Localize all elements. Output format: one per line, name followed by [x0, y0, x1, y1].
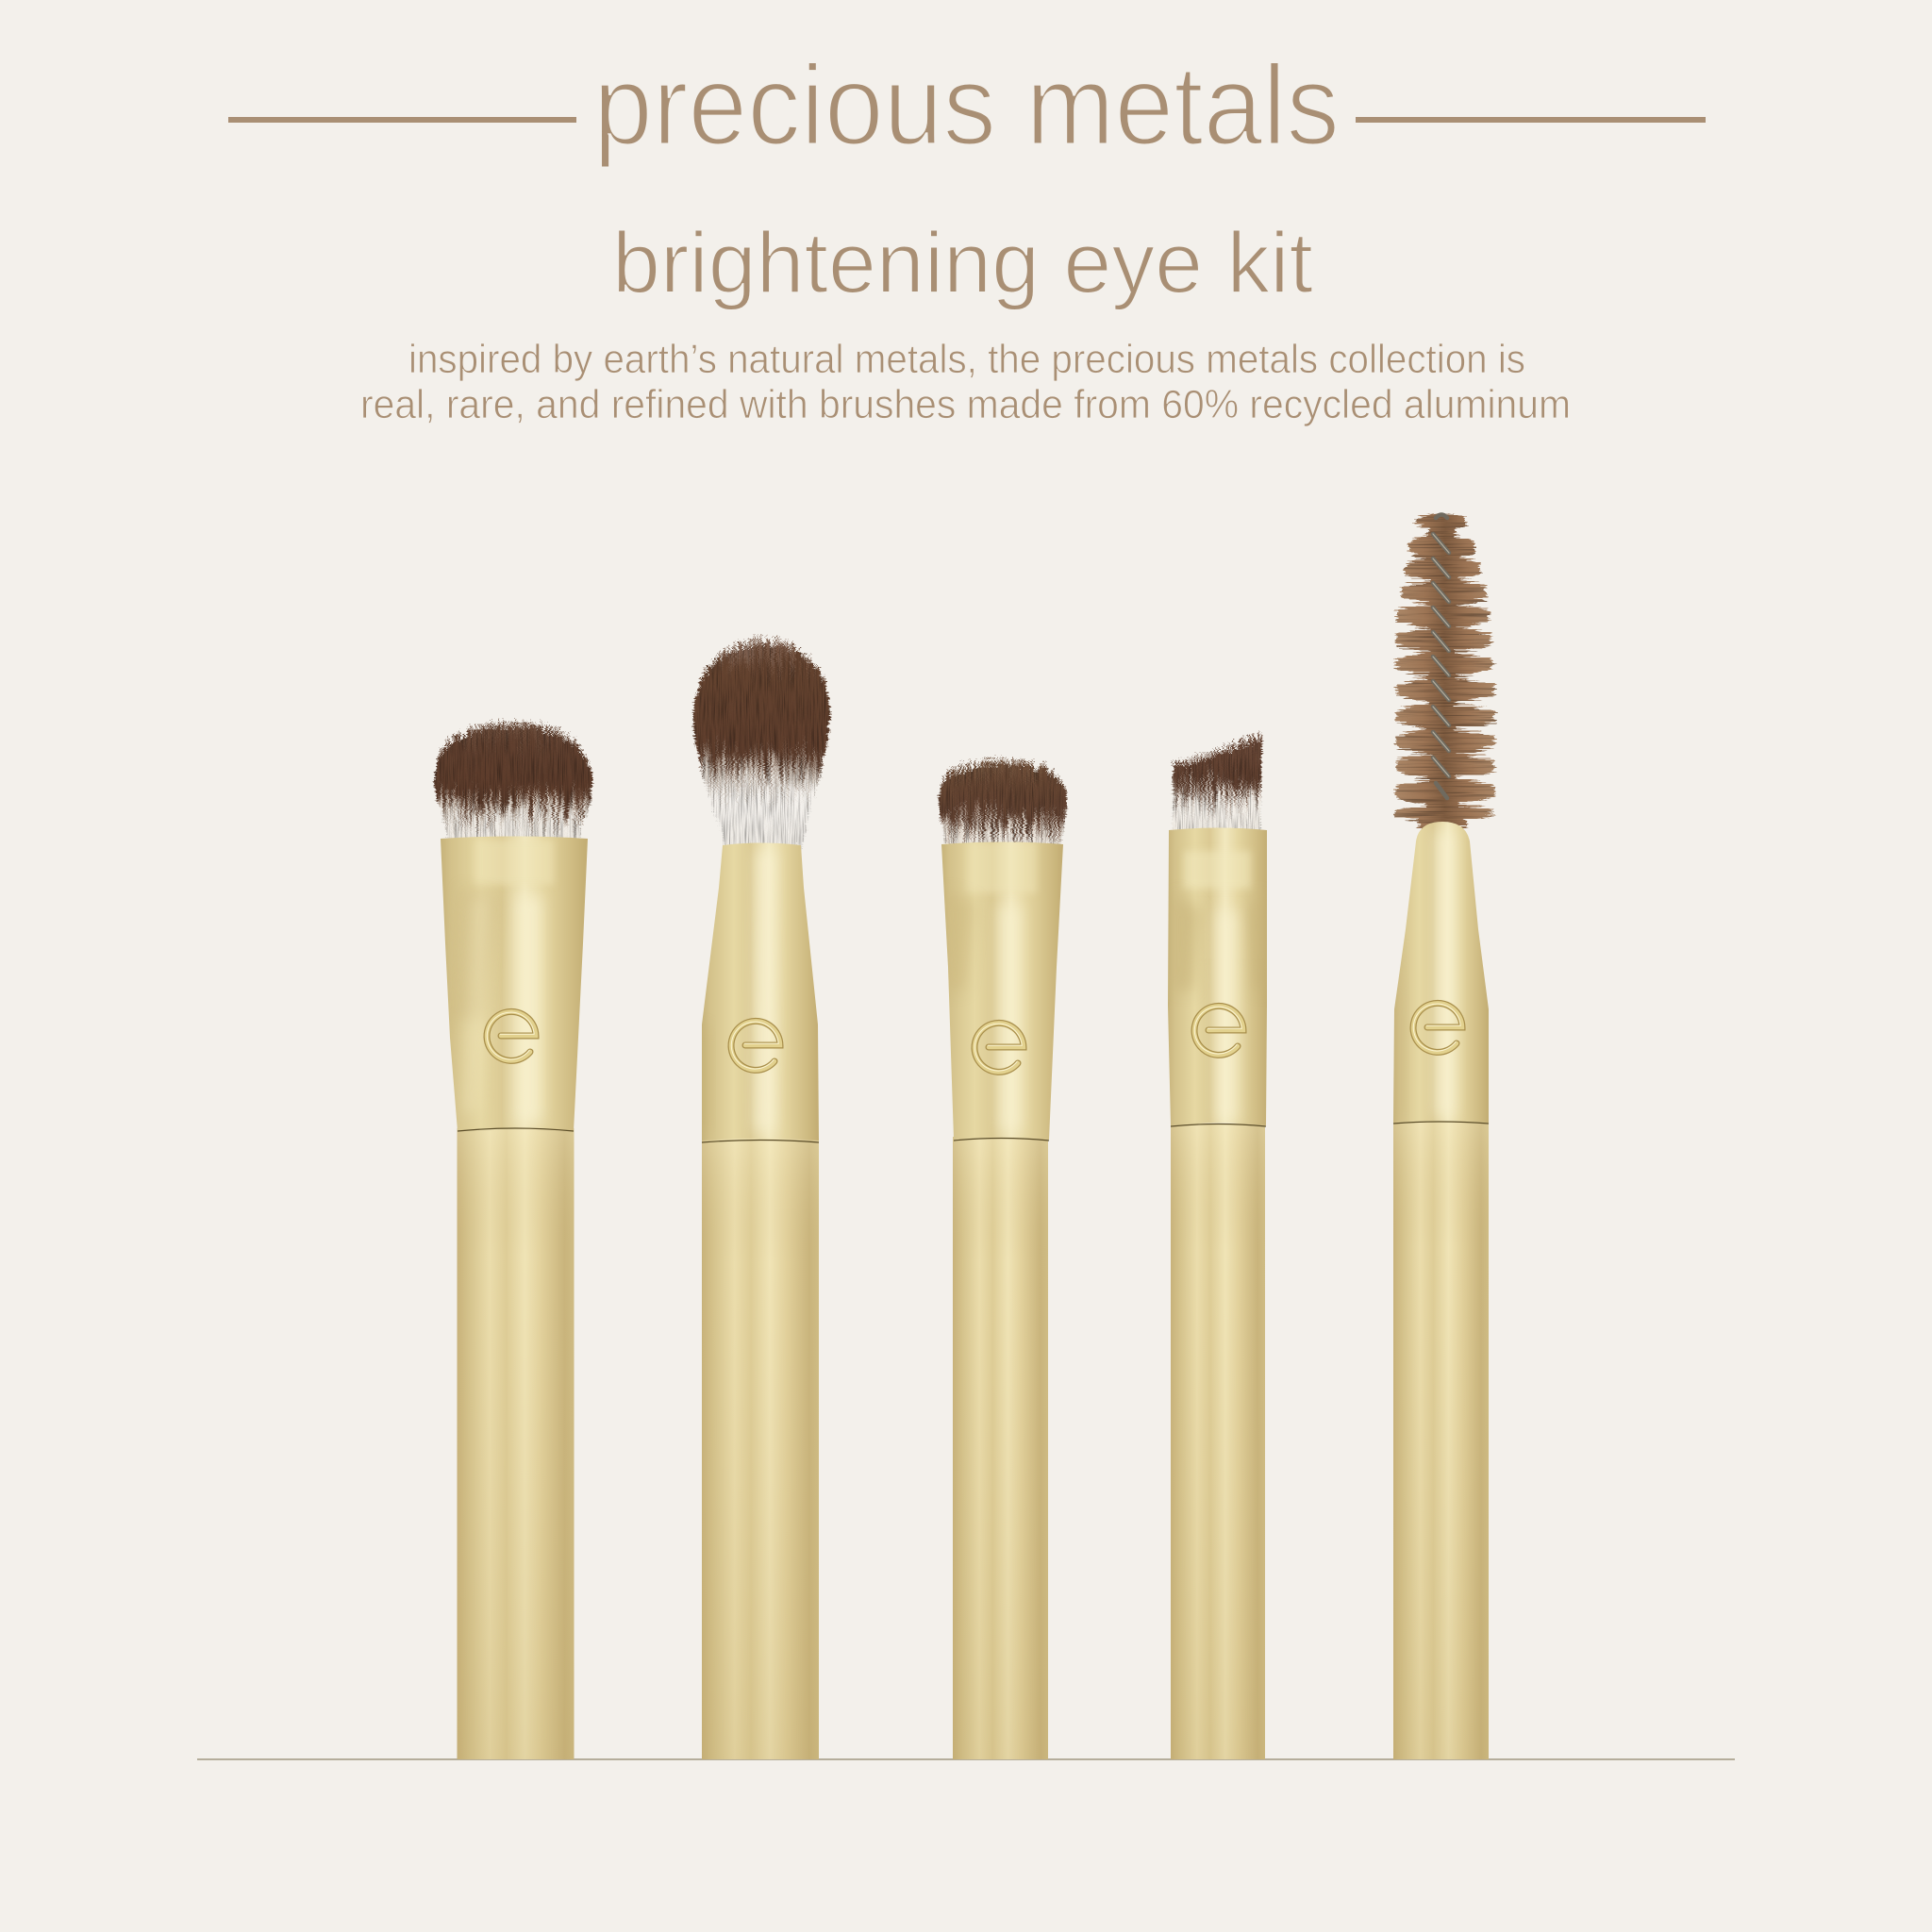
lower handle — [457, 1128, 574, 1759]
joint seam — [702, 1140, 819, 1142]
brush 3: small shader — [937, 755, 1068, 1759]
lower handle — [1393, 1120, 1489, 1759]
joint seam — [458, 1128, 574, 1131]
bristles — [937, 755, 1068, 844]
bristles — [1170, 730, 1264, 830]
icon: e logo — [487, 1011, 536, 1060]
bristles — [691, 634, 832, 851]
description text — [360, 337, 1571, 427]
description text: inspired by earth’s natural metals, the precious metals collection is — [408, 337, 1525, 382]
lower handle — [1171, 1124, 1265, 1759]
lower handle — [702, 1138, 819, 1759]
ferrule — [702, 843, 819, 1141]
title with side rules — [228, 41, 1706, 169]
icon: e logo — [1194, 1006, 1243, 1055]
bristles — [432, 718, 594, 839]
brush 5: spoolie — [1391, 513, 1494, 1759]
subtitle: brightening eye kit: brightening eye kit — [612, 215, 1313, 311]
title: precious metals: precious metals — [593, 41, 1340, 169]
ferrule — [1166, 824, 1270, 1128]
icon: e logo — [1413, 1003, 1462, 1052]
lower handle — [953, 1137, 1048, 1759]
ferrule — [940, 838, 1065, 1141]
icon: e logo — [731, 1021, 780, 1070]
spoolie wire coil — [1433, 515, 1449, 798]
brush 2: tapered blending — [691, 634, 832, 1759]
description text: real, rare, and refined with brushes made from 60% recycled aluminum — [360, 382, 1571, 427]
ferrule — [1391, 819, 1491, 1125]
brush 1: rounded shader — [432, 718, 594, 1759]
joint seam — [954, 1138, 1049, 1141]
joint seam — [1393, 1122, 1489, 1124]
icon: e logo — [974, 1023, 1024, 1072]
ferrule — [439, 834, 590, 1134]
brush 4: angled liner — [1163, 717, 1272, 1759]
spoolie bristles — [1395, 513, 1494, 828]
joint seam — [1171, 1124, 1266, 1126]
baseline shelf — [197, 1758, 1735, 1760]
